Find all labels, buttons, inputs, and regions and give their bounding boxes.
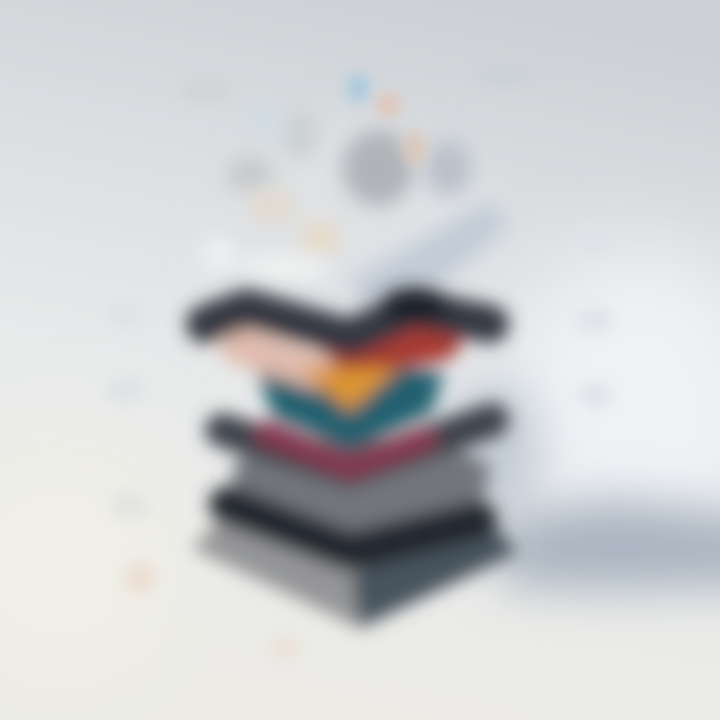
- layer: red, peach and yellow: [238, 342, 442, 412]
- layer: dark slab: [228, 505, 478, 552]
- layer: teal: [258, 362, 444, 450]
- scattered faint marks: [105, 63, 615, 660]
- floating paper cube: [202, 73, 510, 310]
- layer: base grey, left and right faces: [192, 510, 518, 628]
- layer: mid grey block: [230, 440, 490, 545]
- stack of layers: [192, 287, 518, 628]
- layer: dark lower chevron: [222, 420, 492, 470]
- layer: dark top chevron: [205, 287, 490, 338]
- cast shadow: [500, 500, 720, 590]
- layer: maroon: [268, 434, 425, 468]
